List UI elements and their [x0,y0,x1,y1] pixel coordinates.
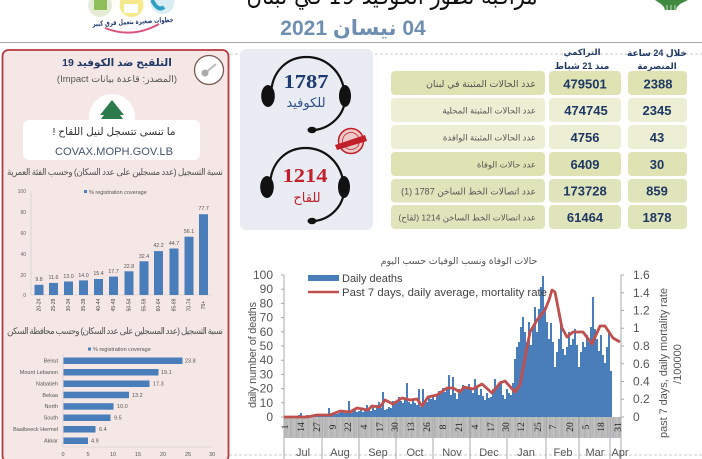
row: confirmed cases [391,71,687,95]
bar chart: registration by age group: 65-69 [172,298,178,311]
bar chart: registration by age group: 15.4 [93,271,104,277]
right axis labels: 0 [633,410,640,424]
bar chart: registration by age group: 35-39 [81,298,87,311]
bar chart: registration by age group: 45-49 [111,298,117,311]
callout: registration reminder [23,120,200,160]
bar chart: registration by governorate: % registration coverage [93,347,151,353]
bar chart: registration by age group: 56.1 [184,229,194,235]
date tick labels: 31 [614,422,624,432]
table: statistics [391,71,687,229]
bar chart: registration by age group: 60 [20,231,26,237]
bar chart: registration by governorate: Nabatieh [36,382,58,388]
table header: cumulative: منذ 21 شباط [555,61,609,71]
month labels [296,447,629,459]
bar chart: registration by age group: 20 [20,273,26,279]
row: local cases: عدد الحالات المثبتة المحلية [442,106,536,116]
month labels: Nov [442,447,462,459]
left axis labels: 30 [260,368,273,382]
month labels: Oct [406,447,424,459]
right axis labels: 1.2 [633,304,650,318]
table header: last 24 hours [627,48,687,72]
bar chart: registration by age group: 13.0 [63,274,74,280]
row: deaths: 30 [650,157,664,172]
bar chart: registration by governorate: Akkar [44,438,58,444]
icon: headset 1214 [260,148,350,224]
table header: last 24 hours: خلال 24 ساعة [627,48,687,58]
row: deaths: 6409 [571,157,599,172]
bar chart: registration by age group: 80 [20,210,26,216]
right axis labels: 0.8 [633,339,650,353]
bar chart: registration by age group: 20-24 [36,298,42,311]
row: imported cases: عدد الحالات المثبتة الوافدة [443,132,536,142]
heading: deaths chart: حالات الوفاة ونسب الوفيات حسب اليوم [381,256,538,267]
date tick labels: 22 [344,422,354,432]
chart: daily deaths and mortality rate [247,268,684,459]
date tick labels: 17 [487,422,497,432]
date tick labels: 30 [502,422,512,432]
panel: vaccination [2,50,228,459]
logo: cedar top right [655,0,688,10]
bar chart: registration by age group: 11.6 [49,275,59,281]
bar chart: registration by governorate: 9.5 [114,416,122,422]
right axis labels [633,268,650,424]
month labels: Jul [296,447,310,459]
date tick labels: 7 [549,424,559,429]
bar chart: registration by governorate: 17.3 [153,382,164,388]
bar chart: registration by age group [18,189,211,311]
bar chart: registration by governorate: North [45,404,58,410]
right axis title: /100000 [672,344,684,384]
bar chart: registration by age group: 42.2 [153,243,164,249]
row: calls to 1214: عدد اتصالات الخط الساخن 1214 (لقاح) [398,212,536,222]
right axis title: past 7 days, daily mortality rate [658,288,670,438]
logo: campaign slogan [88,0,174,33]
bar chart: registration by governorate: Baalbeeck Hermel [13,427,58,433]
left axis labels: 0 [266,410,273,424]
right axis labels: 0.6 [633,357,650,371]
left axis labels: 10 [260,396,273,410]
left axis labels: 20 [260,382,273,396]
date heading: 04 نيسان 2021 [280,17,426,40]
table header: cumulative [555,47,609,71]
left axis title: daily number of deaths [247,302,259,408]
left axis labels: 100 [253,268,273,282]
date tick labels: 30 [391,422,401,432]
row: calls to 1787: 859 [646,184,668,198]
bar chart: registration by governorate: South [44,416,58,422]
legend: Daily deaths [342,273,403,285]
date strip [284,417,621,438]
bar chart: registration by governorate: 15 [135,452,141,458]
row: calls to 1787 [391,179,687,202]
icon: syringe badge [194,56,224,84]
date tick labels: 12 [517,422,527,432]
bar chart: registration by governorate: 19.1 [161,370,172,376]
row: imported cases [391,125,687,149]
subheading: source: (المصدر: قاعدة بيانات Impact) [57,74,177,85]
date tick labels: 9 [329,424,339,429]
right axis labels: 1.6 [633,268,650,282]
row: calls to 1787: عدد اتصالات الخط الساخن 1787 (1) [401,186,536,196]
logo: campaign slogan: خطوات صغيرة بتعمل فرق كبير [92,16,174,28]
heading: coverage by governorate: نسبة التسجيل (عدد المسجلين على عدد السكان) وحسب محافظة السكن [7,326,223,336]
date tick labels: 21 [455,422,465,432]
left axis labels [253,268,273,424]
bar chart: registration by age group: 30-34 [66,298,72,311]
bar chart: registration by governorate: 13.2 [132,393,143,399]
right axis labels: 1.4 [633,286,650,300]
bar chart: registration by age group: 14.0 [78,273,89,279]
right axis labels: 0.4 [633,374,650,388]
month labels: Jan [517,447,535,459]
row: local cases: 474745 [564,103,608,118]
date tick labels: 4 [471,424,481,429]
icon: free stamp [335,128,367,154]
table header: last 24 hours: المنصرمة [637,61,677,72]
date tick labels: 8 [439,424,449,429]
bar chart: registration by governorate: 10.0 [117,404,128,410]
month labels: Sep [368,447,388,459]
callout: registration reminder: COVAX.MOPH.GOV.LB [55,146,173,158]
icon: headset 1787 [261,57,351,133]
date tick labels: 1 [281,424,291,429]
bar chart: registration by age group: 9.8 [35,277,43,283]
month labels: Feb [554,447,572,459]
bar chart: registration by age group: 44.7 [169,241,179,247]
bar chart: registration by governorate: 5 [86,452,90,458]
bar chart: registration by age group: 40 [20,252,26,258]
bar chart: registration by governorate: Bekaa [42,393,59,399]
left axis labels: 70 [260,310,273,324]
bar chart: registration by governorate: 6.4 [99,427,107,433]
bar chart: registration by governorate [13,347,215,458]
bar chart: registration by governorate: 20 [160,452,166,458]
bar chart: registration by age group: 22.8 [124,264,134,270]
row: calls to 1214 [391,205,687,229]
date tick labels: 26 [423,422,433,432]
row: calls to 1214: 61464 [567,210,604,225]
month labels: Apr [611,447,629,459]
row: imported cases: 4756 [571,130,599,145]
bar chart: registration by age group: 40-44 [96,298,102,311]
bar chart: registration by age group: % registration coverage [89,190,147,196]
heading: coverage by age: نسبة التسجيل (عدد مسجلين على عدد السكان) وحسب الفئة العمرية [7,167,223,177]
bar chart: registration by governorate: Beirut [44,358,58,364]
month labels: Aug [330,447,350,459]
bar chart: registration by age group: 17.7 [108,269,119,275]
left axis labels: 80 [260,296,273,310]
row: confirmed cases: عدد الحالات المثبتة في لبنان [426,79,536,90]
row: imported cases: 43 [650,130,664,145]
row: confirmed cases: 479501 [563,76,607,92]
month labels: Mar [586,447,605,459]
left axis labels: 40 [260,353,273,367]
right axis labels: 1 [633,321,640,335]
bar chart: registration by age group: 0 [23,293,26,299]
date tick labels: 13 [407,422,417,432]
bar chart: registration by age group: 60-64 [156,298,162,311]
row: calls to 1787: 173728 [563,184,607,198]
date tick labels: 4 [360,424,370,429]
row: deaths: عدد حالات الوفاة [477,160,536,170]
left axis labels: 50 [260,339,273,353]
bars: daily deaths [285,276,611,417]
bar chart: registration by age group: 100 [18,189,26,195]
legend [308,273,547,299]
bar chart: registration by governorate: 10 [110,452,116,458]
bar chart: registration by age group: 55-59 [142,298,148,311]
table header: cumulative: التراكمي [563,47,601,58]
right axis labels: 0.2 [633,392,650,406]
bar chart: registration by age group: 32.4 [139,254,149,260]
line: 7-day average mortality rate [284,290,620,417]
heading: vaccination: التلقيح ضد الكوفيد 19 [62,57,172,69]
bar chart: registration by governorate: 0 [61,452,65,458]
date tick labels: 17 [376,422,386,432]
bar chart: registration by governorate: 4.9 [91,438,99,444]
hotline number 1214: 1214 [282,165,328,187]
date tick labels: 5 [582,424,592,429]
bar chart: registration by age group: 50-54 [126,298,132,311]
date tick labels: 20 [566,422,576,432]
bar chart: registration by governorate: Mount Lebanon [20,370,58,376]
row: local cases [391,98,687,122]
row: calls to 1214: 1878 [643,210,671,225]
date tick labels [281,422,624,432]
bar chart: registration by governorate: 23.8 [185,358,196,364]
date tick labels: 18 [597,422,607,432]
legend: Past 7 days, daily average, mortality rate [342,287,547,299]
row: local cases: 2345 [643,103,671,118]
panel: hotlines [240,49,373,230]
row: deaths [391,152,687,176]
bar chart: registration by governorate: 25 [185,452,191,458]
hotline label vaccine: للقاح [293,190,321,206]
left axis labels: 60 [260,325,273,339]
icon: cedar in circle [89,94,135,140]
row: confirmed cases: 2388 [644,76,672,92]
date tick labels: 25 [534,422,544,432]
bar chart: registration by age group: 75+ [201,301,207,309]
bar chart: registration by governorate: 30 [209,452,215,458]
hotline label covid: للكوفيد [286,95,326,111]
month labels: Dec [479,447,499,459]
date tick labels: 14 [297,422,307,432]
hotline number 1787: 1787 [284,71,328,93]
date tick labels: 27 [313,422,323,432]
bar chart: registration by age group: 70-74 [186,298,192,311]
left axis labels: 90 [260,282,273,296]
right axis title [658,288,684,438]
bar chart: registration by age group: 25-29 [51,298,57,311]
bar chart: registration by age group: 77.7 [199,206,209,212]
callout: registration reminder: ما تنسى تتسجل لنيل اللقاح ! [52,126,176,138]
